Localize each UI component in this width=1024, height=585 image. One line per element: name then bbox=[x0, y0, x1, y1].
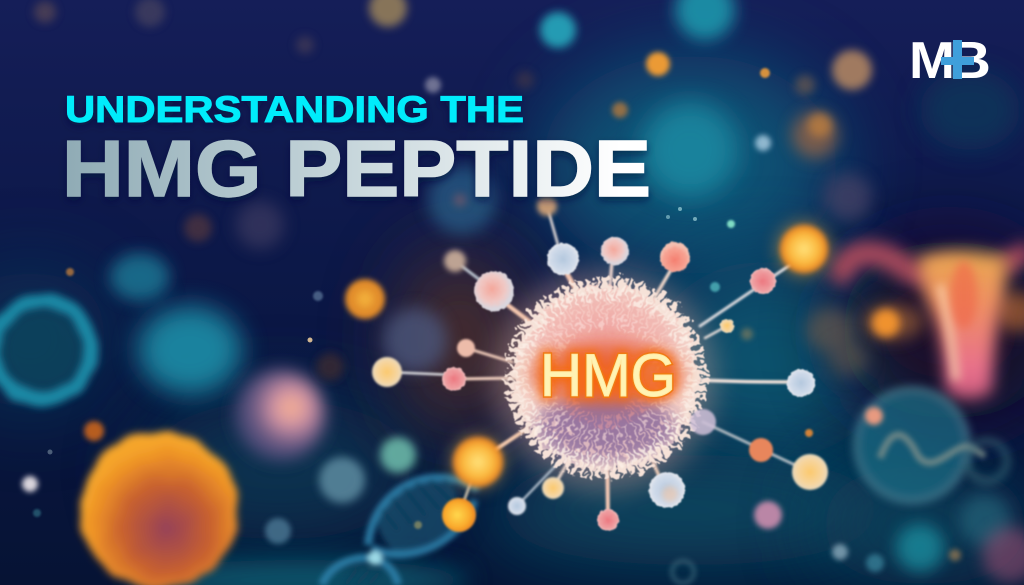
logo: M bbox=[909, 32, 955, 90]
title bbox=[62, 89, 651, 213]
molecule nodes bbox=[372, 196, 828, 532]
DNA helix bbox=[322, 478, 478, 585]
blurred circular cell with wave bbox=[856, 389, 1007, 501]
subtitle line: UNDERSTANDING THE bbox=[65, 89, 524, 130]
HMG label: HMG bbox=[540, 342, 676, 409]
uterus illustration bbox=[806, 250, 1024, 399]
logo: B bbox=[949, 32, 991, 90]
HMG label: HMG bbox=[540, 342, 676, 409]
main heading: HMG PEPTIDE bbox=[62, 124, 651, 213]
cell ring left bbox=[0, 301, 91, 399]
orange spiky cell bbox=[80, 431, 238, 585]
logo bbox=[909, 32, 991, 90]
HMG label: HMG bbox=[540, 342, 676, 409]
glow behind central molecule bbox=[451, 221, 832, 492]
molecule stems bbox=[387, 206, 810, 520]
central HMG cell bbox=[512, 284, 700, 472]
